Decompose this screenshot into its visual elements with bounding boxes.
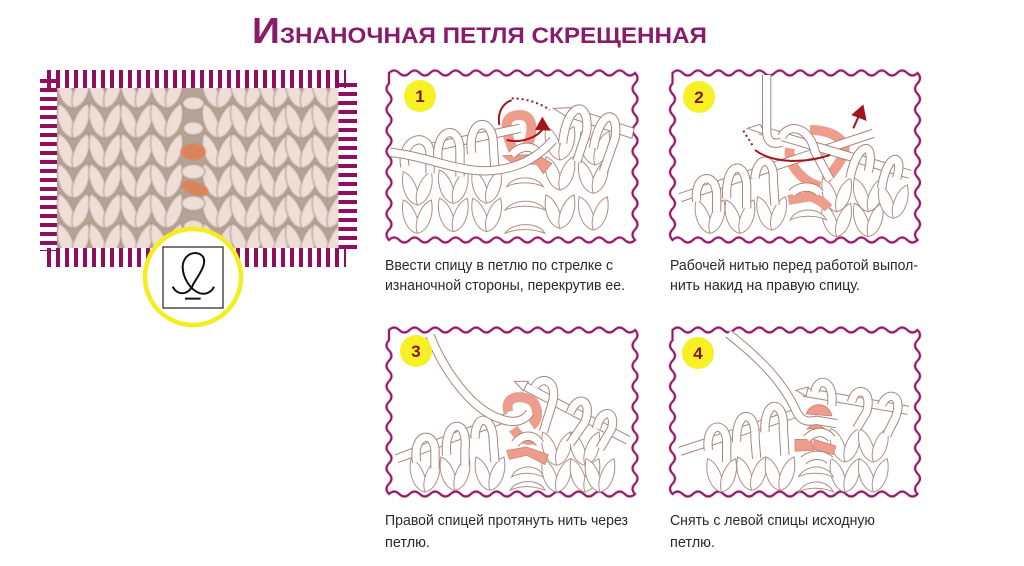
panel: step 2 (670, 70, 920, 242)
text: step 2 caption (670, 257, 918, 294)
swatch stitches (56, 88, 338, 248)
badge 1: 1 (415, 87, 425, 106)
text: step 3 caption: петлю. (385, 534, 430, 551)
badge 1 (404, 80, 436, 112)
text: step 2 caption: Рабочей нитью перед работой выпол- (670, 257, 918, 274)
text: step 1 caption (385, 257, 625, 294)
badge 3 (400, 335, 432, 367)
text: step 2 caption: нить накид на правую спицу. (670, 277, 860, 294)
diagram: step 1 stitches (390, 98, 634, 233)
text: step 1 caption: изнаночной стороны, перекрутив ее. (385, 277, 625, 294)
panel: step 3 (387, 328, 637, 496)
badge 3: 3 (411, 342, 421, 361)
icon: crossed purl stitch symbol in yellow circle (145, 229, 241, 325)
text: step 4 caption (670, 512, 875, 551)
fringe border (47, 79, 348, 258)
text: step 1 caption: Ввести спицу в петлю по стрелке с (385, 257, 613, 274)
badge 4 (682, 337, 714, 369)
panel: step 1 (387, 70, 637, 242)
orange highlighted stitches (180, 143, 210, 199)
title: ИЗНАНОЧНАЯ ПЕТЛЯ СКРЕЩЕННАЯ (252, 10, 707, 51)
diagram: step 4 stitches (680, 334, 908, 492)
panel: knitted swatch photo (47, 73, 348, 258)
diagram: step 2 stitches (680, 75, 910, 237)
badge 2: 2 (694, 88, 704, 107)
badge 2 (683, 81, 715, 113)
badge 4: 4 (693, 344, 703, 363)
text: step 3 caption (385, 512, 628, 551)
text: step 3 caption: Правой спицей протянуть нить через (385, 512, 628, 529)
panel: step 4 (670, 328, 920, 496)
text: step 4 caption: Снять с левой спицы исходную (670, 512, 875, 529)
diagram: step 3 stitches (397, 335, 628, 492)
text: step 4 caption: петлю. (670, 534, 715, 551)
